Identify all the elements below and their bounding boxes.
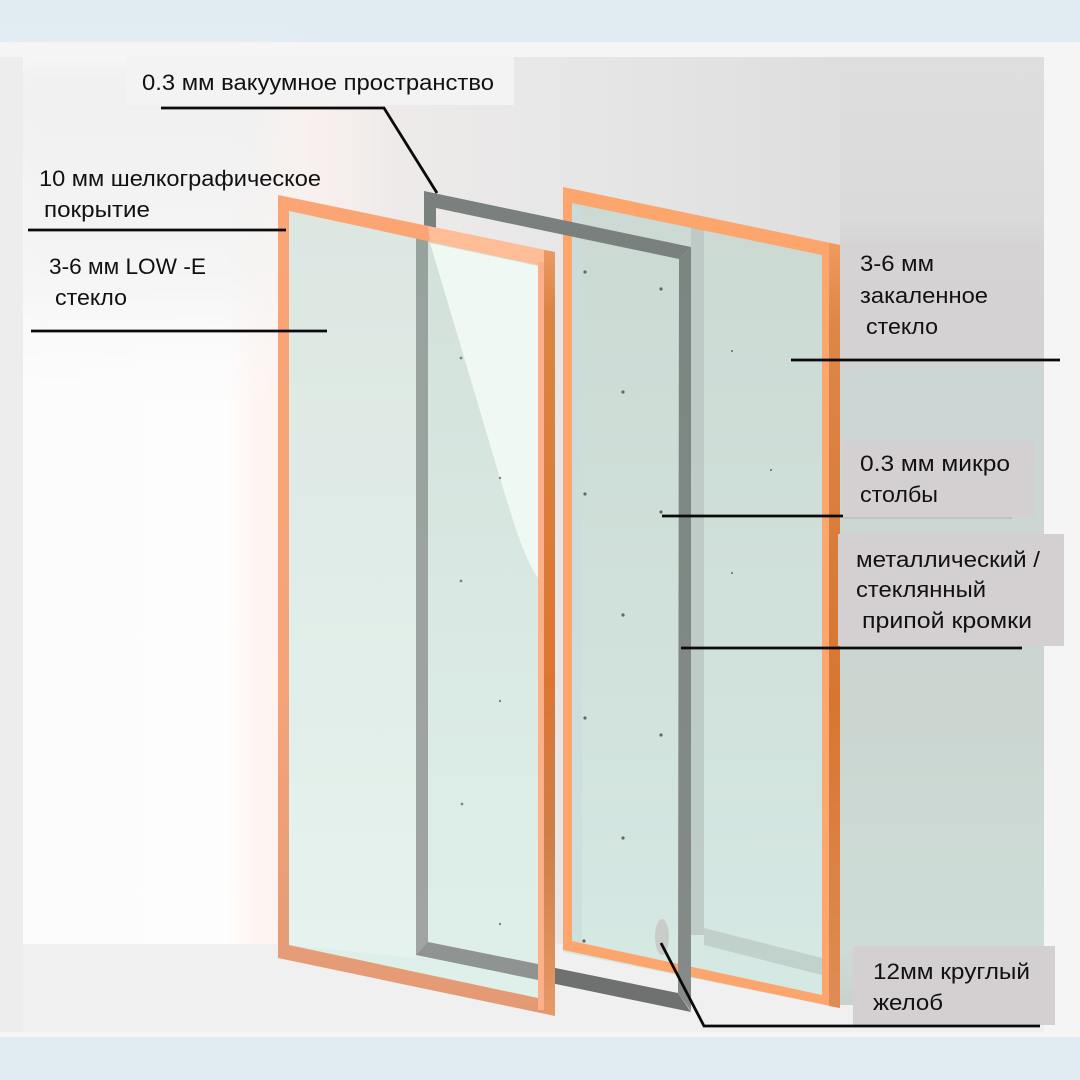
label: low-e glass: стекло	[55, 285, 127, 310]
pale blue strip inside back frame	[572, 205, 582, 942]
lighter inner strip of right edge	[538, 262, 544, 1010]
label: micro pillars	[860, 451, 1010, 507]
faint pillars through front pane	[460, 357, 501, 925]
grey frame bottom bar	[416, 942, 691, 1012]
round pump-out groove	[655, 919, 669, 955]
darker right edge of front pane	[544, 250, 555, 1016]
grey frame seen through front pane, side	[416, 236, 428, 955]
front pane: low-e glass with orange frame	[278, 195, 555, 1016]
label: metal or glass edge solder: металлический /	[856, 547, 1041, 572]
label: 12 mm round groove: 12мм круглый	[873, 959, 1030, 984]
leader line: silk-screen coating	[28, 229, 286, 231]
label panel: edge solder	[838, 534, 1064, 646]
label: 12 mm round groove: желоб	[873, 990, 943, 1015]
orange frame of back pane	[563, 187, 840, 1008]
leader line: low-e glass	[31, 330, 327, 332]
grey frame seen through front pane, bottom	[416, 942, 538, 980]
leader line: micro pillars	[662, 515, 843, 517]
label panel: vacuum gap	[126, 57, 514, 105]
label: tempered glass: закаленное	[860, 283, 988, 308]
leader line: tempered glass	[791, 359, 1060, 361]
leader line: vacuum gap	[161, 108, 437, 193]
label: 10 mm silk-screen coating	[39, 166, 321, 222]
thin underline of micro pillars label	[843, 517, 1012, 519]
floor shadow seen through back pane	[704, 928, 822, 975]
label: metal or glass edge solder: стеклянный	[856, 577, 986, 602]
grey frame right bar	[678, 247, 691, 1011]
label: low-e glass	[49, 254, 206, 310]
leader line: edge solder	[681, 647, 1022, 649]
label: metal or glass edge solder: припой кромки	[862, 608, 1032, 633]
label: 12 mm round groove	[873, 959, 1030, 1015]
back pane: tempered glass with orange frame	[563, 187, 840, 1008]
label: 10 mm silk-screen coating: 10 мм шелкографическое	[39, 166, 321, 191]
label panel: micro pillars	[843, 441, 1034, 517]
grey frame top bar	[424, 191, 691, 259]
label: tempered glass: стекло	[866, 314, 938, 339]
middle layer: grey edge seal frame	[416, 191, 691, 1012]
label: 10 mm silk-screen coating: покрытие	[44, 197, 150, 222]
label: low-e glass: 3-6 мм LOW -E	[49, 254, 206, 279]
darker right edge of back pane	[829, 243, 840, 1008]
orange frame of front pane	[278, 195, 555, 1016]
leader line: round groove	[661, 943, 1040, 1026]
label: 0.3 mm vacuum gap: 0.3 мм вакуумное пространство	[142, 70, 494, 95]
label: tempered glass	[860, 251, 988, 339]
label: micro pillars: столбы	[860, 482, 938, 507]
label: tempered glass: 3-6 мм	[860, 251, 934, 276]
lighter top right segment	[428, 226, 545, 265]
label panel: round groove	[853, 946, 1055, 1025]
label: metal or glass edge solder	[856, 547, 1041, 633]
light band behind the grey frame	[691, 228, 704, 935]
label: micro pillars: 0.3 мм микро	[860, 451, 1010, 476]
micro pillars dots on back pane	[582, 270, 772, 943]
reflection on front pane	[430, 243, 538, 578]
lighter left half of front glass	[289, 211, 416, 958]
